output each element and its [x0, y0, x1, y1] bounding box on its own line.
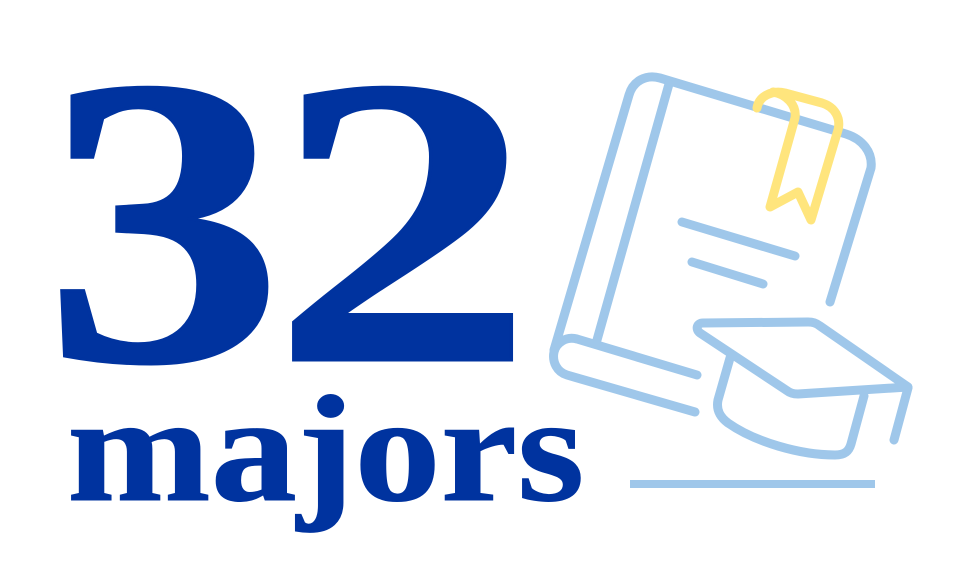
icon: book with graduation cap — [554, 77, 908, 484]
number: 32: 2 — [272, 0, 534, 449]
icon: bookmark — [757, 92, 839, 220]
icon: graduation cap — [697, 322, 908, 455]
number: 32 — [44, 0, 534, 450]
baseline rule — [630, 480, 875, 488]
icon: book — [554, 77, 871, 412]
label: majors: majors — [67, 365, 584, 534]
number: 32: 3 — [44, 0, 283, 450]
